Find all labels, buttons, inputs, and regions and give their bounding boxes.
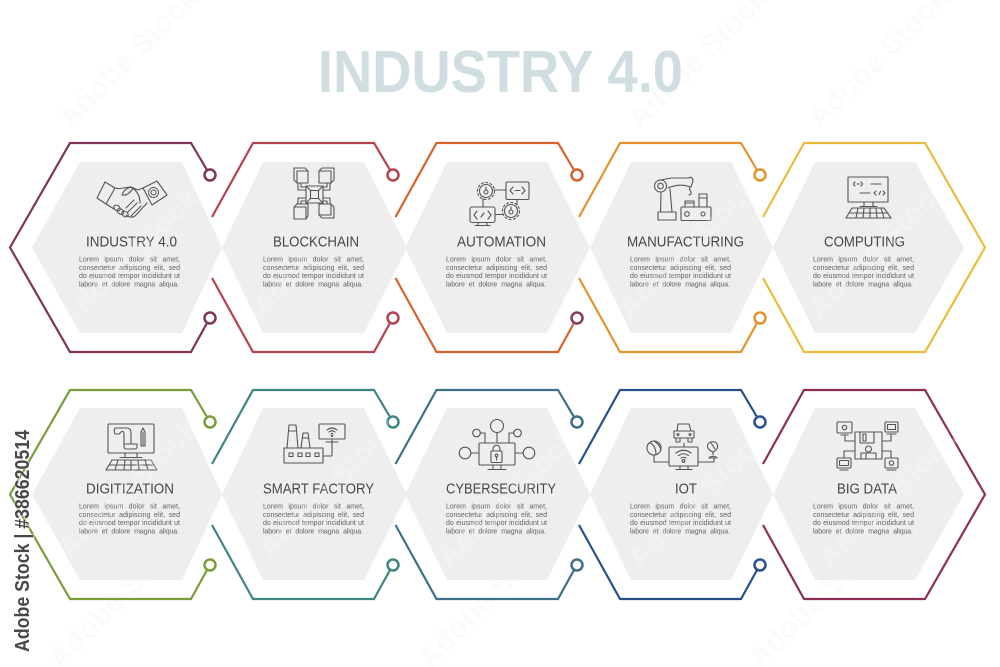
text: Adobe Stock [52, 182, 205, 335]
heading: SMART FACTORY [263, 482, 374, 498]
heading: INDUSTRY 4.0 [86, 234, 177, 250]
stock watermark id: Adobe Stock | #386620514 [12, 429, 34, 652]
text block: consectetur adipiscing elit, sed [446, 265, 547, 272]
text block: do eiusmod tempor incididunt ut [630, 520, 731, 527]
text block: consectetur adipiscing elit, sed [630, 512, 731, 519]
icon: big data [837, 422, 898, 470]
heading: IOT [675, 482, 697, 498]
text block: do eiusmod tempor incididunt ut [263, 273, 364, 280]
text: Adobe Stock [802, 172, 955, 325]
icon: computer [846, 177, 891, 218]
panel: digitization [10, 390, 222, 599]
text block [263, 256, 364, 288]
text block: consectetur adipiscing elit, sed [79, 265, 180, 272]
text block [79, 256, 180, 288]
icon: robot arm and machine [654, 177, 711, 220]
text block: labore et dolore magna aliqua. [79, 528, 179, 536]
text block: do eiusmod tempor incididunt ut [446, 273, 547, 280]
panel: industry 4.0 [10, 143, 222, 352]
heading: BLOCKCHAIN [273, 234, 359, 250]
text block: labore et dolore magna aliqua. [813, 528, 913, 536]
text: Adobe Stock [612, 172, 765, 325]
text block: do eiusmod tempor incididunt ut [263, 520, 364, 527]
text block: Lorem ipsum dolor sit amet, [79, 504, 180, 510]
text block [446, 504, 547, 536]
text block: Lorem ipsum dolor sit amet, [446, 256, 547, 264]
text block: labore et dolore magna aliqua. [446, 282, 546, 288]
text block: Lorem ipsum dolor sit amet, [446, 504, 547, 510]
text block: labore et dolore magna aliqua. [79, 282, 179, 288]
heading: MANUFACTURING [627, 234, 744, 250]
text block: Lorem ipsum dolor sit amet, [630, 256, 731, 264]
text block: consectetur adipiscing elit, sed [263, 265, 364, 272]
text block: Lorem ipsum dolor sit amet, [813, 256, 914, 264]
panel: cybersecurity [396, 390, 590, 599]
text block [263, 504, 364, 536]
text block: Lorem ipsum dolor sit amet, [630, 504, 731, 510]
text: Adobe Stock [812, 422, 965, 575]
title: INDUSTRY 4.0 [318, 38, 683, 105]
icon: smart factory [284, 424, 345, 463]
text block: do eiusmod tempor incididunt ut [79, 520, 180, 527]
panel: big data [763, 390, 985, 599]
heading: CYBERSECURITY [446, 482, 556, 498]
text block: Lorem ipsum dolor sit amet, [263, 256, 364, 264]
text block: consectetur adipiscing elit, sed [79, 512, 180, 519]
text: Adobe Stock [432, 422, 585, 575]
text block: do eiusmod tempor incididunt ut [630, 273, 731, 280]
icon: handshake [97, 181, 167, 218]
text: Adobe Stock [52, 412, 205, 565]
icon: cybersecurity [459, 420, 535, 470]
text block [79, 504, 180, 536]
text block: consectetur adipiscing elit, sed [813, 512, 914, 519]
text block: do eiusmod tempor incididunt ut [813, 273, 914, 280]
text block: do eiusmod tempor incididunt ut [813, 520, 914, 527]
icon: automation [470, 182, 529, 226]
text: Adobe Stock [252, 412, 405, 565]
heading: BIG DATA [837, 482, 897, 498]
panel: automation [396, 143, 590, 352]
text block [813, 504, 914, 536]
text block: Lorem ipsum dolor sit amet, [79, 256, 180, 264]
text: Adobe [232, 246, 321, 335]
panel: smart factory [212, 390, 407, 599]
panel: computing [763, 143, 985, 352]
text block: labore et dolore magna aliqua. [263, 528, 363, 536]
text block: Lorem ipsum dolor sit amet, [263, 504, 364, 510]
text block: labore et dolore magna aliqua. [630, 282, 730, 288]
icon: digital document on computer [106, 424, 157, 470]
text block: labore et dolore magna aliqua. [446, 528, 546, 536]
text block: do eiusmod tempor incididunt ut [446, 520, 547, 527]
heading: DIGITIZATION [86, 482, 174, 498]
text block: consectetur adipiscing elit, sed [446, 512, 547, 519]
panel: manufacturing [579, 143, 773, 352]
panel: blockchain [212, 143, 407, 352]
text block: do eiusmod tempor incididunt ut [79, 273, 180, 280]
heading: COMPUTING [824, 234, 905, 250]
text block [813, 256, 914, 288]
text block: consectetur adipiscing elit, sed [263, 512, 364, 519]
heading: AUTOMATION [457, 234, 546, 250]
text block: Lorem ipsum dolor sit amet, [813, 504, 914, 510]
text block [630, 256, 731, 288]
text block [630, 504, 731, 536]
text block [446, 256, 547, 288]
text block: consectetur adipiscing elit, sed [813, 265, 914, 272]
icon: internet of things [647, 424, 718, 470]
text block: labore et dolore magna aliqua. [263, 282, 363, 288]
panel: iot [579, 390, 773, 599]
text block: consectetur adipiscing elit, sed [630, 265, 731, 272]
text: Adobe Stock [622, 422, 775, 575]
text block: labore et dolore magna aliqua. [813, 282, 913, 288]
text block: labore et dolore magna aliqua. [630, 528, 730, 536]
icon: blockchain [294, 168, 334, 219]
